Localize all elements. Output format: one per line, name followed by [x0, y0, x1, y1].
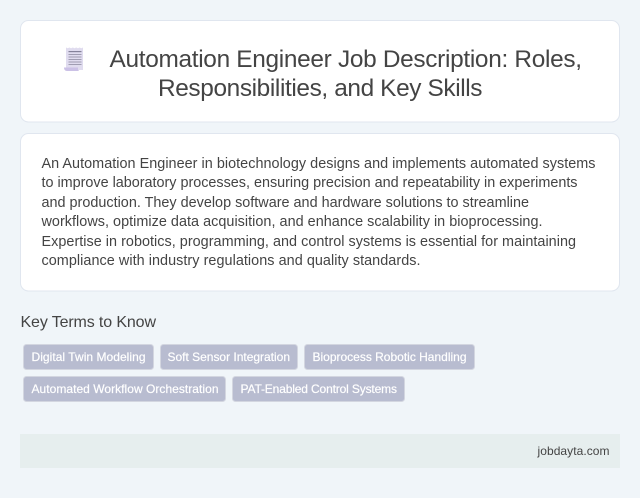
- panel: description: [20, 134, 620, 291]
- tag: digital twin modeling: Digital Twin Modeling: [32, 350, 146, 364]
- description text: An Automation Engineer in biotechnology designs and implements automated systems: [42, 156, 596, 172]
- tag: automated workflow orchestration: [24, 376, 226, 402]
- description text: and production. They develop software and hardware solutions to streamline: [42, 195, 529, 211]
- title: Automation Engineer Job Description: Roles,: [110, 46, 582, 73]
- tag: automated workflow orchestration: Automated Workflow Orchestration: [32, 382, 218, 396]
- tag: PAT-enabled control systems: PAT-Enabled Control Systems: [240, 382, 397, 396]
- panel: header: [20, 20, 620, 122]
- tag: bioprocess robotic handling: Bioprocess Robotic Handling: [312, 350, 466, 364]
- heading: key terms: Key Terms to Know: [20, 314, 156, 331]
- footer: jobdayta.com: [536, 444, 610, 458]
- tag: soft sensor integration: Soft Sensor Integration: [168, 350, 290, 364]
- description text: compliance with industry regulations and quality standards.: [42, 253, 420, 269]
- tag: bioprocess robotic handling: [304, 344, 474, 370]
- description text: to improve laboratory processes, ensuring precision and repeatability in experiments: [42, 175, 578, 191]
- description text: Expertise in robotics, programming, and control systems is essential for maintaining: [42, 234, 576, 250]
- title: [110, 46, 582, 102]
- footer: [20, 434, 620, 468]
- icon: document scroll: [64, 48, 83, 71]
- tag: soft sensor integration: [160, 344, 298, 370]
- description text: workflows, optimize data acquisition, and enhance scalability in bioprocessing.: [40, 214, 542, 230]
- tag: digital twin modeling: [24, 344, 154, 370]
- description text: [40, 156, 596, 269]
- key term tags: [24, 344, 474, 402]
- tag: PAT-enabled control systems: [232, 376, 404, 402]
- title: Responsibilities, and Key Skills: [158, 75, 482, 102]
